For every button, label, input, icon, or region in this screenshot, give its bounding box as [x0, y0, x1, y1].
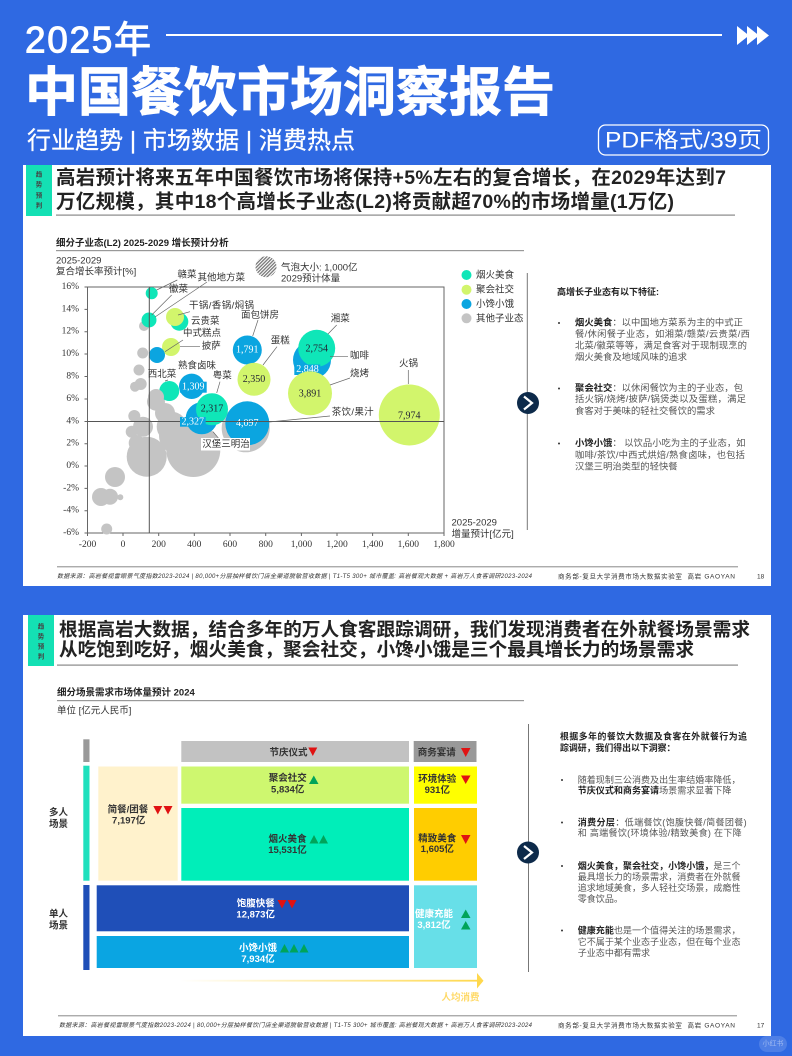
x axis labels: 0	[121, 540, 126, 550]
insight: social dining: 聚会社交：以休闲餐饮为主的子业态，包	[575, 382, 743, 393]
teal bubbles	[142, 287, 188, 401]
row axis bars	[83, 739, 90, 970]
footer: 商务部-复旦大学消费市场大数据实验室 高岩 GAOYAN	[558, 572, 735, 580]
insight: smoke cuisine: 北菜/徽菜等等，满足食客对于现制现烹的	[575, 340, 747, 350]
format badge: PDF格式/39页	[605, 128, 762, 152]
plot frame	[84, 287, 444, 536]
column header: festive	[181, 741, 409, 762]
insight: healthy: 健康充能也是一个值得关注的场景需求，	[578, 924, 741, 936]
bubble labels: 蛋糕	[271, 334, 290, 346]
insight: social dining: 括火锅/烧烤/披萨/锅煲类以及蛋糕，满足	[575, 393, 746, 404]
cell: healthy: 健康充能	[415, 908, 453, 920]
scenario matrix	[49, 739, 484, 1004]
bubble: 1,791: 1,791	[236, 344, 259, 356]
cell: snacks	[97, 936, 409, 968]
trend tag: 趋	[36, 170, 43, 178]
cell: healthy: 3,812亿	[417, 919, 451, 931]
bubble: 2,317: 2,317	[201, 404, 223, 414]
bubble labels: 干锅/香锅/焖锅	[189, 300, 254, 312]
insight: decline: 随着现制三公消费及出生率结婚率降低，	[578, 774, 741, 785]
y axis labels: 2%	[66, 439, 79, 449]
category legend: 烟火美食	[476, 269, 515, 281]
chart title: 细分子业态(L2) 2025-2029 增长预计分析	[56, 237, 229, 249]
insight: growth scenes: 烟火美食，聚会社交，小馋小饿，是三个	[578, 860, 741, 871]
bubble labels: 咖啡	[350, 350, 370, 362]
y axis labels: -2%	[63, 483, 79, 493]
category legend: 其他子业态	[476, 312, 524, 324]
bubble labels: 赣菜	[178, 268, 197, 280]
insights text	[560, 731, 747, 958]
category legend: 聚会社交	[476, 284, 515, 296]
insight: social dining	[558, 382, 746, 416]
insight: snacks: 咖啡/茶饮/中西式烘焙/熟食卤味，也包括	[575, 449, 745, 460]
x axis labels: 1,000	[291, 540, 312, 550]
panel: dining scenarios	[23, 615, 771, 1036]
cell: smoke cuisine: 烟火美食	[268, 833, 307, 845]
bubble labels: 云贵菜	[191, 315, 220, 327]
icon: triple arrows	[737, 26, 769, 45]
row label: group	[49, 806, 68, 830]
category legend: 小馋小饿	[476, 298, 515, 310]
bubble labels: 火锅	[399, 358, 418, 370]
row label: group: 场景	[49, 818, 68, 830]
bubble: 1,309: 1,309	[182, 382, 205, 392]
cell: quick meals	[97, 885, 409, 931]
bubble labels: 徽菜	[169, 283, 189, 295]
insight: decline	[561, 774, 741, 796]
bubble labels: 面包饼房	[241, 309, 279, 321]
bubble labels: 中式糕点	[183, 327, 222, 339]
bubble labels: 粤菜	[213, 370, 232, 382]
insight: growth scenes: 零食饮品。	[578, 893, 623, 904]
bubble: blue burger-side	[186, 402, 218, 434]
footer: 数据来源：高岩餐视雷眼景气度指数2023-2024 | 80,000+分层抽样餐饮门店全渠道脱敏营收数据 | T1-T5 300+ 城市覆盖: 高岩餐观大数据 + 高岩万人食客调研2023-2024	[59, 1021, 533, 1029]
format badge	[598, 125, 768, 155]
watermark	[759, 1036, 787, 1052]
insight: snacks	[558, 437, 746, 472]
bubble chart	[56, 256, 524, 550]
x axis labels: -200	[79, 540, 96, 550]
insight: smoke cuisine: 餐/休闲餐子业态，如湘菜/赣菜/云贵菜/西	[575, 328, 750, 339]
bubble: 1,791	[233, 336, 262, 364]
bubble labels: 披萨	[202, 340, 221, 352]
insights text: 高增长子业态有以下特征:	[557, 286, 659, 297]
bubble labels: 湘菜	[331, 312, 350, 324]
insight: smoke cuisine: 烟火美食及地域风味的追求	[575, 351, 687, 362]
trend tag	[26, 165, 52, 216]
cell: quick meals: 饱腹快餐	[237, 898, 275, 910]
cell: ambience: 931亿	[425, 784, 450, 796]
unit label: 单位 [亿元人民币]	[57, 704, 131, 716]
bubble: 4,097: 4,097	[236, 418, 259, 429]
bubble: 2,317	[196, 393, 228, 425]
x axis title	[452, 518, 514, 540]
insight: social dining: 食客对于美味的轻社交餐饮的需求	[575, 405, 715, 416]
bubble: 7,974	[379, 384, 440, 446]
watermark: 小红书	[762, 1038, 784, 1048]
y axis title	[56, 256, 136, 278]
x axis labels	[79, 540, 455, 550]
bubble labels: 其他地方菜	[198, 272, 246, 284]
column header: festive: 节庆仪式	[269, 746, 308, 758]
insights text: 踪调研，我们得出以下洞察：	[560, 742, 675, 753]
y axis title: 2025-2029	[56, 256, 101, 266]
insight: growth scenes	[561, 860, 741, 904]
trend tag: 势	[36, 180, 43, 188]
x axis labels: 400	[187, 540, 202, 550]
footer	[57, 566, 765, 580]
year title: 2025年	[25, 20, 151, 60]
header	[25, 20, 769, 155]
gray bubble on top of teal	[148, 389, 164, 405]
x axis labels: 1,600	[398, 540, 419, 550]
trend tag: 判	[38, 652, 45, 660]
insights text: 根据多年的餐饮大数据及食客在外就餐行为追	[560, 731, 747, 742]
panel heading: 根据高岩大数据，结合多年的万人食客跟踪调研，我们发现消费者在外就餐场景需求	[59, 619, 750, 640]
bubble: 3,891: 3,891	[299, 388, 321, 400]
bubble: 4,097	[225, 401, 269, 445]
y axis labels: 16%	[62, 282, 79, 292]
insight: healthy: 子业态中都有需求	[578, 947, 650, 958]
cell: simple meals	[98, 766, 178, 881]
insight: growth scenes: 追求地域美食，多人轻社交场景，成瘾性	[578, 882, 741, 893]
insight: tiering: 和 高端餐饮(环境体验/精致美食) 在下降	[578, 827, 742, 838]
insight: snacks: 汉堡三明治类型的轻快餐	[575, 460, 678, 472]
panel heading: 万亿规模，其中18个高增长子业态(L2)将贡献超70%的市场增量(1万亿)	[56, 190, 674, 213]
trend tag: 预	[38, 642, 45, 650]
lime and blue small bubbles	[149, 308, 184, 363]
x axis labels: 600	[223, 540, 237, 550]
y axis labels	[62, 282, 79, 538]
bubble labels: 茶饮/果汁	[332, 406, 374, 418]
horizontal reference line	[88, 420, 444, 422]
x axis title: 2025-2029	[452, 518, 497, 528]
cell: quick meals: 12,873亿	[236, 908, 275, 920]
cell: social dining: 聚会社交	[269, 772, 307, 784]
divider with arrow	[517, 724, 539, 972]
insight: healthy	[561, 924, 741, 958]
vertical reference line	[148, 287, 150, 533]
cell: fine dining	[414, 808, 477, 881]
x axis labels: 1,400	[362, 540, 384, 550]
axis arrow	[180, 973, 484, 988]
panel heading: 从吃饱到吃好，烟火美食，聚会社交，小馋小饿是三个最具增长力的场景需求	[59, 639, 694, 660]
label: 2,848: 2,848	[296, 364, 319, 375]
footer: 18	[757, 574, 765, 580]
y axis labels: 8%	[66, 372, 79, 382]
row label: solo: 单人	[49, 908, 68, 920]
category legend	[462, 269, 524, 324]
insight: growth scenes: 最具增长力的场景需求，消费者在外就餐	[578, 871, 741, 882]
y axis labels: -6%	[63, 528, 79, 538]
size legend: 气泡大小: 1,000亿	[281, 262, 358, 274]
y axis labels: -4%	[63, 506, 79, 516]
trend tag	[28, 615, 54, 666]
trend tag: 预	[36, 190, 43, 200]
size legend: 2029预计体量	[281, 272, 341, 284]
row label: solo: 场景	[49, 920, 68, 932]
y axis labels: 14%	[62, 304, 79, 314]
y axis labels: 12%	[62, 327, 79, 337]
insight: healthy: 它不属于某个业态子业态，但在每个业态	[578, 936, 741, 947]
x axis labels: 1,200	[326, 540, 348, 550]
cell: snacks: 小馋小饿	[239, 942, 277, 954]
bubble: 7,974: 7,974	[398, 410, 421, 422]
cell: ambience: 环境体验	[418, 773, 457, 785]
footer: 商务部-复旦大学消费市场大数据实验室 高岩 GAOYAN	[558, 1020, 735, 1030]
cell: ambience	[414, 766, 477, 804]
trend tag: 势	[38, 632, 45, 640]
main title: 中国餐饮市场洞察报告	[25, 64, 555, 122]
insight: smoke cuisine	[558, 316, 750, 362]
insights text	[557, 286, 750, 472]
trend tag: 趋	[38, 622, 45, 630]
x axis labels: 1,800	[433, 540, 455, 550]
trend tag: 判	[36, 200, 43, 210]
row label: group: 多人	[49, 806, 68, 818]
bubble: 2,754	[298, 330, 335, 367]
gray bubbles: other sub-formats	[92, 321, 270, 534]
bubble labels: 烧烤	[350, 368, 370, 380]
header rule	[166, 34, 722, 36]
panel heading	[57, 619, 750, 666]
column header: business: 商务宴请	[418, 746, 456, 758]
y axis labels: 10%	[62, 349, 79, 359]
x axis title: 增量预计[亿元]	[452, 528, 514, 540]
cell: fine dining: 1,605亿	[421, 843, 454, 855]
footer: 数据来源：高岩餐视雷眼景气度指数2023-2024 | 80,000+分层抽样餐饮门店全渠道脱敏营收数据 | T1-T5 300+ 城市覆盖: 高岩餐观大数据 + 高岩万人食客调研2023-2024	[57, 572, 533, 580]
bubble: blue coffee	[293, 341, 331, 379]
insight: tiering: 消费分层：低端餐饮(饱腹快餐/简餐团餐)	[578, 816, 747, 828]
y axis title: 复合增长率预计[%]	[56, 266, 136, 278]
cell: simple meals: 7,197亿	[112, 814, 146, 826]
cell: fine dining: 精致美食	[418, 832, 457, 844]
divider with arrow	[517, 273, 539, 530]
footer	[58, 1015, 765, 1030]
row label: solo	[49, 908, 68, 932]
y axis labels: 4%	[66, 416, 79, 426]
y axis labels: 6%	[66, 394, 79, 404]
y axis labels: 0%	[66, 461, 79, 471]
footer: 17	[757, 1022, 765, 1030]
chart title: 细分场景需求市场体量预计 2024	[57, 686, 195, 698]
cell: snacks: 7,934亿	[241, 953, 275, 965]
subtitle: 行业趋势 | 市场数据 | 消费热点	[27, 128, 355, 154]
bubble labels	[148, 268, 418, 450]
cell: social dining	[181, 766, 409, 804]
bubble: 2,754: 2,754	[305, 344, 328, 354]
x axis labels: 200	[152, 540, 166, 550]
panel heading: 高岩预计将来五年中国餐饮市场将保持+5%左右的复合增长，在2029年达到7	[56, 166, 726, 189]
bubble: 2,350: 2,350	[243, 374, 265, 385]
x axis labels: 800	[259, 540, 273, 550]
bubble labels: 熟食卤味	[178, 360, 217, 372]
cell: simple meals: 简餐/团餐	[108, 804, 149, 816]
panel heading	[56, 166, 735, 216]
insight: snacks: 小馋小饿： 以饮品小吃为主的子业态，如	[575, 437, 746, 448]
bubble labels: 西北菜	[148, 368, 177, 380]
axis label: 人均消费	[442, 992, 480, 1004]
bubble labels: 汉堡三明治	[202, 438, 250, 450]
label: 2,327: 2,327	[181, 416, 204, 428]
bubble: 1,309	[179, 374, 207, 399]
cell: social dining: 5,834亿	[271, 784, 305, 796]
cell: smoke cuisine	[181, 808, 409, 881]
bubble: 3,891	[288, 371, 332, 415]
leader lines	[152, 280, 408, 440]
insight: tiering	[561, 816, 747, 838]
insight: decline: 节庆仪式和商务宴请场景需求显著下降	[578, 784, 731, 796]
bubble: 2,350	[238, 363, 270, 396]
cell: healthy	[414, 885, 477, 968]
cell: smoke cuisine: 15,531亿	[268, 844, 307, 856]
panel: growth forecast	[23, 165, 771, 586]
size legend	[256, 256, 358, 284]
insight: smoke cuisine: 烟火美食：以中国地方菜系为主的中式正	[575, 316, 743, 328]
column header: business	[414, 741, 476, 762]
